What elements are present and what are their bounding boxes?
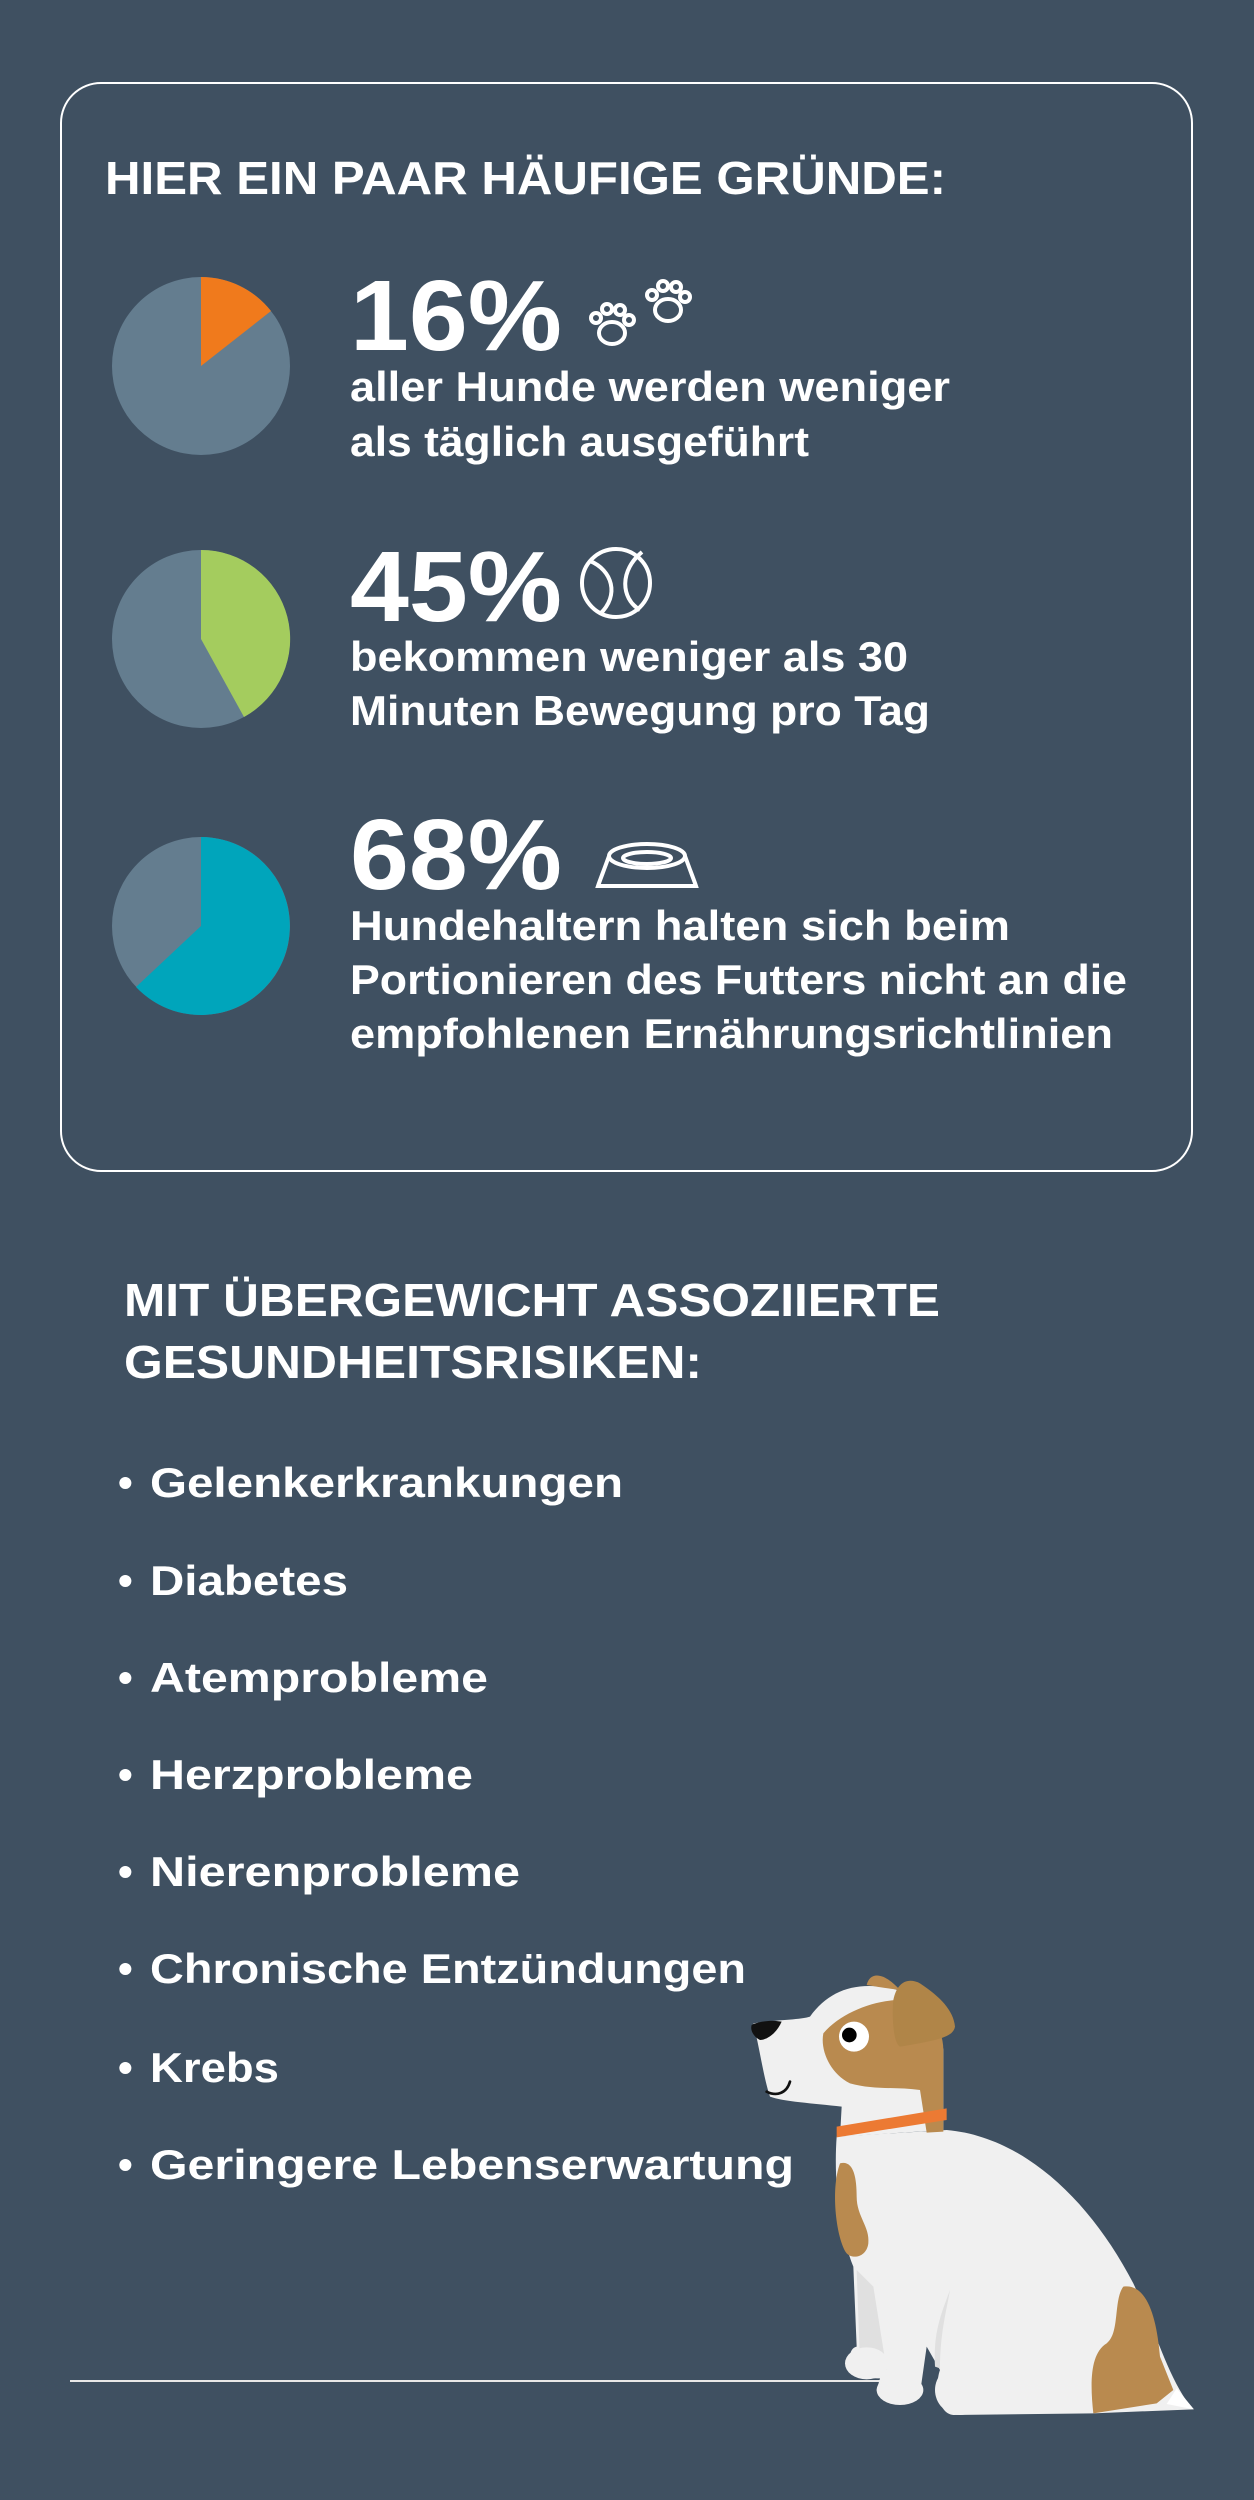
text: 68% description — [350, 902, 1127, 1057]
heading: health risks — [124, 1274, 940, 1388]
list: health risks: • — [118, 1848, 133, 1895]
text: 45% description: bekommen weniger als 30 — [350, 633, 908, 680]
icon: bowl — [598, 844, 696, 886]
list: health risks: Atemprobleme — [150, 1654, 488, 1701]
text: 68% description: empfohlenen Ernährungsrichtlinien — [350, 1010, 1113, 1057]
heading: reasons: HIER EIN PAAR HÄUFIGE GRÜNDE: — [105, 152, 946, 204]
text: 16% description — [350, 363, 950, 465]
list: health risks: • — [118, 1751, 133, 1798]
pie chart 16% — [112, 277, 290, 455]
list: health risks: • — [118, 1945, 133, 1992]
text: 16% description: aller Hunde werden weniger — [350, 363, 950, 410]
pie chart 45% — [112, 550, 290, 728]
pie chart 68% — [112, 837, 290, 1015]
list: health risks — [118, 1459, 794, 2188]
icon: ball — [582, 549, 650, 617]
text: 68% description: Hundehaltern halten sich beim — [350, 902, 1010, 949]
list: health risks: Chronische Entzündungen — [150, 1945, 746, 1992]
list: health risks: • — [118, 2141, 133, 2188]
stat 45%: 45% — [350, 531, 562, 643]
text: 16% description: als täglich ausgeführt — [350, 418, 809, 465]
list: health risks: Geringere Lebenserwartung — [150, 2141, 794, 2188]
heading: health risks: MIT ÜBERGEWICHT ASSOZIIERTE — [124, 1274, 940, 1326]
list: health risks: Gelenkerkrankungen — [150, 1459, 623, 1506]
list: health risks: Herzprobleme — [150, 1751, 473, 1798]
stat 16%: 16% — [350, 260, 562, 372]
list: health risks: Krebs — [150, 2044, 279, 2091]
icon: paws — [591, 281, 690, 344]
text: 68% description: Portionieren des Futters nicht an die — [350, 956, 1127, 1003]
stat 68%: 68% — [350, 799, 562, 911]
text: 45% description: Minuten Bewegung pro Tag — [350, 687, 930, 734]
illustration: dog — [751, 1976, 1194, 2415]
list: health risks: • — [118, 1459, 133, 1506]
heading: health risks: GESUNDHEITSRISIKEN: — [124, 1336, 702, 1388]
list: health risks: Nierenprobleme — [150, 1848, 520, 1895]
panel: reasons — [61, 83, 1192, 1171]
text: 45% description — [350, 633, 930, 734]
list: health risks: Diabetes — [150, 1557, 348, 1604]
list: health risks: • — [118, 2044, 133, 2091]
list: health risks: • — [118, 1654, 133, 1701]
list: health risks: • — [118, 1557, 133, 1604]
